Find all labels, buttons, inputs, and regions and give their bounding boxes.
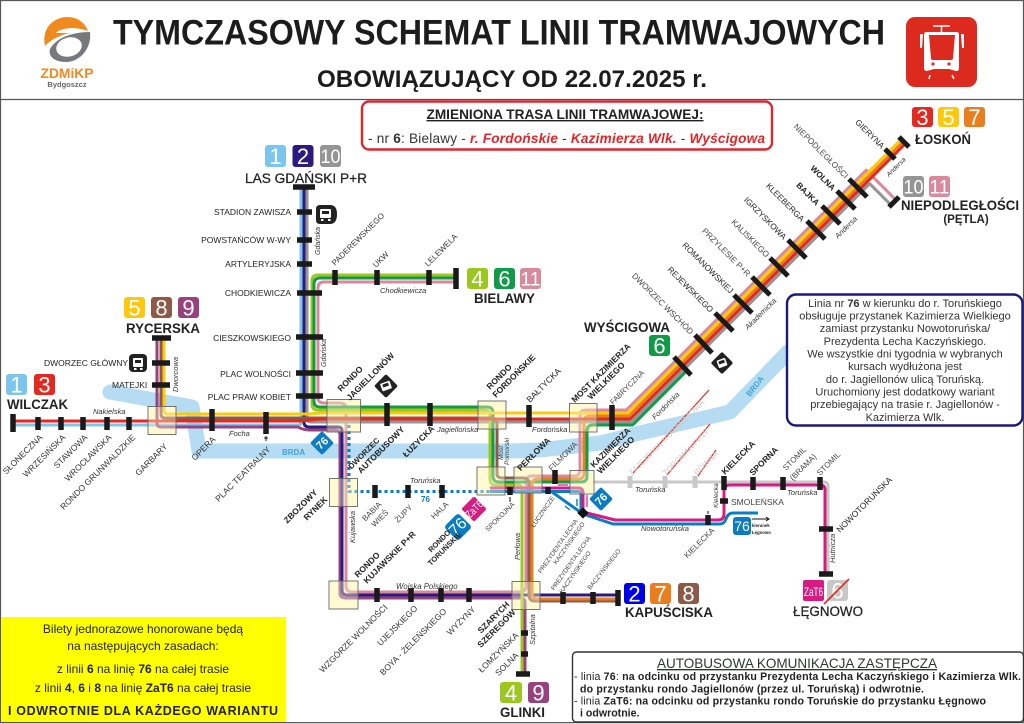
terminus: Łoskoń: 5 <box>942 105 955 130</box>
stop labels: central bold: JAGIELLONÓW <box>344 349 397 402</box>
callout: changed route: - nr 6: Bielawy - r. Fordońskie - Kazimierza Wlk. - Wyścigowa <box>368 131 765 146</box>
info box: line 76: przebiegający na trasie r. Jagiellonów - <box>810 399 1000 411</box>
terminus: Rycerska <box>124 296 200 336</box>
terminus: Niepodległości: NIEPODLEGŁOŚCI <box>901 198 1019 213</box>
line 11 <box>318 170 896 592</box>
stop labels: closed stops: RÓWNA <box>692 449 721 477</box>
terminus: Wilczak: WILCZAK <box>7 397 68 412</box>
line 7 <box>532 142 904 599</box>
terminus: Las Gdański P+R: LAS GDAŃSKI P+R <box>245 171 367 186</box>
stop labels: central bold: WIELKIEGO <box>585 360 627 401</box>
stop labels: Wojska Polskiego: BOYA - ŻELEŃSKIEGO <box>378 606 449 677</box>
terminus: Bielawy: 4 <box>471 266 484 292</box>
stop labels: Prezydenta Lecha Kaczyńskiego and Baczyńskiego <box>537 517 623 595</box>
stop labels: central lower: ŁUZYCKA <box>401 423 436 459</box>
panel: ticket rules: I ODWROTNIE DLA KAŻDEGO WARIANTU <box>8 703 278 718</box>
terminus: Wyścigowa <box>584 320 670 358</box>
line 6 <box>314 278 687 482</box>
badge: ZaT6 at Rondo Toruńskie: ZaT6 <box>463 498 486 521</box>
terminus: Łęgnowo <box>793 578 863 619</box>
stop labels: Chodkiewicza <box>330 211 460 269</box>
stop labels: Dworcowa: DWORZEC GŁÓWNY <box>44 358 128 368</box>
stop labels: central bold <box>335 341 780 585</box>
panel: replacement bus service: do przystanku rondo Jagiellonów (przez ul. Toruńską) i odwrotnie. <box>580 684 924 696</box>
stop labels: diagonal to Łoskoń: ROMANOWSKIEJ <box>680 240 736 295</box>
stop labels: central lower: WIELKIEGO <box>595 434 637 476</box>
terminus: Kapuściska <box>624 582 713 620</box>
stop labels: central lower: RONDO <box>426 528 453 554</box>
badge: 76 at Rondo Toruńskie: 76 <box>446 515 471 540</box>
stop labels: Wojska Polskiego: WZGÓRZE WOLNOŚCI <box>317 602 389 675</box>
terminus: Rycerska: 5 <box>128 296 141 320</box>
stop labels: central bold: RONDO <box>335 364 365 393</box>
tram network lines <box>13 139 906 672</box>
stop labels: Prezydenta Lecha Kaczyńskiego and Baczyńskiego: PREZYDENTA LECHA <box>550 534 593 592</box>
terminus: Łęgnowo: ŁĘGNOWO <box>793 604 863 619</box>
street names: Wojska Polskiego <box>396 582 458 591</box>
stop labels: Gdańska: ARTYLERYJSKA <box>225 259 291 269</box>
street names: Toruńska <box>635 485 666 494</box>
stop labels: Toruńska east: STOMIL <box>781 445 809 472</box>
icon: tram <box>906 17 977 87</box>
terminus: Rycerska: 9 <box>182 296 195 320</box>
terminus: Kapuściska: 7 <box>654 582 667 606</box>
stop labels: grey secondary: WIEŚ <box>370 508 390 529</box>
stop labels: diagonal to Łoskoń <box>630 117 887 336</box>
stop labels: Wilczak line: GARBARY <box>133 441 170 478</box>
icon: bus at Stadion Zawisza <box>316 205 337 224</box>
terminus: Las Gdański P+R <box>245 144 367 186</box>
stop labels: central lower: PERŁOWA <box>515 435 552 473</box>
terminus: Łoskoń: 3 <box>916 105 929 130</box>
stop labels: diagonal to Łoskoń: KALISKIEGO <box>729 217 772 260</box>
line 5 <box>164 139 901 414</box>
stop labels: grey secondary: ŁUCZNICZE <box>530 495 557 529</box>
line 1 <box>13 187 301 425</box>
stop labels: central lower: SZEREGÓW <box>475 606 518 649</box>
badge: 76 direction Łęgnowo: 76 <box>734 518 750 534</box>
stop labels: Gdańska: CIESZKOWSKIEGO <box>213 333 291 343</box>
stop labels: diagonal to Łoskoń: GIERYNA <box>853 117 887 151</box>
street names: Toruńska <box>787 488 818 497</box>
street names: Fordońska <box>532 425 567 434</box>
terminus: Las Gdański P+R: 10 <box>320 147 340 168</box>
terminus: Wyścigowa: 6 <box>653 334 666 358</box>
stop labels: Wojska Polskiego: UJEJSKIEGO <box>375 603 420 648</box>
terminus: Glinki: 9 <box>532 680 545 706</box>
line 4 <box>312 275 522 672</box>
stop labels: diagonal to Łoskoń: PRZYLESIE P+R <box>700 226 753 278</box>
street names: Focha <box>229 429 250 438</box>
terminus: Glinki: GLINKI <box>500 705 545 720</box>
stop labels: Gdańska: PLAC PRAW KOBIET <box>208 392 291 402</box>
stop labels: Gdańska: STADION ZAWISZA <box>214 207 291 217</box>
stop labels: Gdańska: CHODKIEWICZA <box>225 288 291 298</box>
badge: 76 direction Łęgnowo <box>733 517 771 535</box>
info box: line 76: obsługuje przystanek Kazimierza Wielkiego <box>799 310 1011 322</box>
street names: Fordońska <box>650 390 681 421</box>
stop labels: grey secondary: BABIA <box>360 500 384 523</box>
street names <box>93 156 908 645</box>
street names: Pomorski <box>504 437 511 465</box>
stop labels: diagonal to Łoskoń: REJEWSKIEGO <box>666 264 716 315</box>
stop labels: Chodkiewicza: UKW <box>371 250 391 269</box>
stop labels: Wilczak line <box>1 432 273 512</box>
stop labels: Toruńska east: (BRAMA) <box>788 452 819 482</box>
line: grey disused Toruńska <box>593 482 828 574</box>
terminus: Wyścigowa: WYŚCIGOWA <box>584 320 670 335</box>
stop labels: Wojska Polskiego: SOLNA <box>493 650 521 678</box>
stop labels: Prezydenta Lecha Kaczyńskiego and Baczyńskiego: BACZYŃSKIEGO <box>585 547 623 591</box>
direction arrows near Kazimierza Wielkiego <box>558 485 587 510</box>
red strike lines on closed stops <box>633 390 716 476</box>
stop labels: Wojska Polskiego: ŁOMŻYŃSKA <box>476 630 521 674</box>
terminus: Bielawy <box>467 266 541 306</box>
street names: Toruńska <box>410 476 441 485</box>
terminus: Wilczak: 1 <box>10 372 23 398</box>
terminus: Niepodległości: 11 <box>930 178 950 198</box>
info box: line 76: Uruchomiony jest dodatkowy wariant <box>815 386 995 398</box>
street names: Nowotoruńska <box>641 524 689 533</box>
line 76 dotted <box>349 425 490 492</box>
stop labels: Gdańska: POWSTAŃCÓW W-WY <box>201 235 291 245</box>
street names: Gdańska <box>315 227 322 255</box>
stop labels: Wilczak line: STAWOWA <box>52 432 90 470</box>
terminus: Niepodległości: 10 <box>904 178 924 198</box>
info box: line 76: Linia nr 76 w kierunku do r. Toruńskiego <box>808 298 1002 310</box>
line 10 <box>307 184 892 422</box>
street names: Most <box>498 445 505 460</box>
street names: Jagiellońska <box>436 425 478 434</box>
badge: 76 direction Łęgnowo: Łęgnowo <box>752 530 771 535</box>
stop labels: grey secondary: FILMOWA <box>547 440 580 473</box>
stop labels: closed stops: TOROMANTYNY <box>661 427 712 477</box>
stop labels: Wilczak line: SŁONECZNA <box>1 432 45 476</box>
badge: 76 at Kazimierza Wielkiego: 76 <box>593 491 610 508</box>
panel: replacement bus service: i odwrotnie. <box>580 708 639 720</box>
terminus: Rycerska: 8 <box>155 296 168 320</box>
river Brda: BRDA <box>744 374 766 398</box>
stop labels: Gdańska <box>201 207 291 402</box>
stop labels: central lower: TORUŃSKIE <box>426 530 463 568</box>
terminus: Łoskoń: ŁOSKOŃ <box>915 132 971 147</box>
stop labels: Wilczak line: OPERA <box>189 434 218 462</box>
info box: line 76: do r. Jagiellonów ulicą Toruńską. <box>826 374 984 386</box>
stop labels: central lower: SZARYCH <box>476 599 511 635</box>
stop labels: Prezydenta Lecha Kaczyńskiego and Baczyńskiego: KACZYŃSKIEGO <box>551 520 587 566</box>
logo: ZDMiKP Bydgoszcz <box>40 17 94 89</box>
panel: ticket rules: z linii 6 na linię 76 na całej trasie <box>57 662 229 676</box>
stop labels: Wilczak line: RONDO GRUNWALDZKIE <box>58 432 138 512</box>
stop labels: grey secondary: SPOKOJNA <box>485 501 517 533</box>
stop labels: diagonal to Łoskoń: IGRZYSKOWA <box>742 195 789 242</box>
stop labels: central bold: KIELECKA <box>719 439 757 476</box>
line 8 <box>161 338 618 601</box>
street names: Nakielska <box>93 407 126 416</box>
stop labels: Toruńska east: NOWOTORUŃSKA <box>834 474 894 534</box>
stop labels: Toruńska east: SMOLEŃSKA <box>731 497 784 507</box>
stop labels: central lower <box>282 423 637 649</box>
terminus: Rycerska: RYCERSKA <box>126 321 200 336</box>
stop labels: central lower: AUTOBUSOWY <box>355 424 407 475</box>
terminus: Glinki <box>500 680 549 720</box>
interchange backgrounds <box>148 400 597 610</box>
stop labels: Toruńska east: STOMIL <box>815 450 843 477</box>
panel: ticket rules <box>1 617 286 722</box>
terminus: Kapuściska: KAPUŚCISKA <box>625 605 713 620</box>
stop labels: Prezydenta Lecha Kaczyńskiego and Baczyńskiego: KACZYŃSKIEGO <box>557 549 593 595</box>
stop labels: Wojska Polskiego <box>317 602 521 678</box>
stop labels: closed stops: ZAJEZDNIA TRAMWAJOWA <box>627 398 707 477</box>
stop labels: Dworcowa: MATEJKI <box>112 380 147 390</box>
label: 76 on Toruńska: 76 <box>421 495 430 504</box>
icon: bus at Dworzec Wschód <box>711 352 733 374</box>
stop labels: diagonal to Łoskoń: KLEEBERGA <box>764 181 807 224</box>
callout: changed route <box>362 102 772 150</box>
stop labels: central bold: RONDO <box>352 550 382 579</box>
street names: Kujawska <box>348 511 357 543</box>
stop labels: Toruńska east <box>731 445 894 534</box>
street names: Andersa <box>885 156 908 179</box>
stop labels: grey secondary: HALA <box>429 500 451 521</box>
icon: bus at Dworzec Główny <box>129 354 147 372</box>
stop labels: central bold: KUJAWSKIE P+R <box>361 529 418 585</box>
stop labels: grey secondary: KIELECKA <box>682 526 717 560</box>
info box: line 76: zamiast przystanku Nowotoruńska/ <box>820 323 991 335</box>
street names: Chodkiewicza <box>380 286 426 295</box>
panel: replacement bus service: - linia ZaT6: na odcinku od przystanku rondo Toruńskie do przystanku Łęgnowo <box>574 696 987 708</box>
stop labels: Wojska Polskiego: WYŻYNY <box>445 604 478 637</box>
badge: 76 by Brda <box>310 431 334 455</box>
terminus: Las Gdański P+R: 1 <box>269 144 282 169</box>
panel: ticket rules: Bilety jednorazowe honorowane będą <box>43 622 243 636</box>
badge: 76 direction Łęgnowo: kierunek <box>752 523 770 528</box>
subtitle: date: OBOWIĄZUJĄCY OD 22.07.2025 r. <box>317 66 707 93</box>
street names: Szpitalna <box>528 614 537 645</box>
callout: changed route: ZMIENIONA TRASA LINII TRAMWAJOWEJ: <box>426 106 704 122</box>
line 9 <box>157 338 525 672</box>
small stop arrows <box>264 436 708 514</box>
stop labels: Dworcowa <box>44 358 147 390</box>
terminus: Bielawy: 6 <box>498 266 511 292</box>
stop labels: diagonal to Łoskoń: DWORZEC WSCHÓD <box>630 271 696 336</box>
panel: replacement bus service: - linia 76: na odcinku od przystanku Prezydenta Lecha Kaczyńskiego i Kazimierza Wlk. <box>574 671 1021 683</box>
stop labels: central bold: MOST KAZIMIERZA <box>569 341 633 404</box>
stop labels: Wilczak line: WRZESIŃSKA <box>21 432 68 479</box>
panel: ticket rules: na następujących zasadach: <box>67 639 219 653</box>
terminus: Glinki: 4 <box>505 680 517 706</box>
badge: 76 by Brda: 76 <box>314 435 331 452</box>
terminus: Wilczak: 3 <box>38 372 51 398</box>
title: TYMCZASOWY SCHEMAT LINII TRAMWAJOWYCH <box>113 14 885 52</box>
street names: Hutnicza <box>828 534 837 563</box>
panel: replacement bus service: AUTOBUSOWA KOMUNIKACJA ZASTĘPCZA <box>657 656 938 671</box>
street names: Kielecka <box>713 483 720 508</box>
river Brda <box>110 352 788 457</box>
street names: Dworcowa <box>171 357 180 392</box>
terminus: Łoskoń <box>912 105 985 147</box>
terminus: Wilczak <box>6 372 68 412</box>
logo: ZDMiKP Bydgoszcz: ZDMiKP <box>40 65 94 81</box>
terminus: Kapuściska: 8 <box>682 582 695 606</box>
street names: Perłowa <box>513 533 522 560</box>
logo: ZDMiKP Bydgoszcz: Bydgoszcz <box>47 80 87 89</box>
stop labels: central bold: BAŁTYCKA <box>524 366 563 404</box>
line 3 <box>13 144 906 421</box>
stop label: Fabryczna: FABRYCZNA <box>608 368 646 406</box>
stop labels: central lower: ZBOŻOWY <box>282 487 320 525</box>
terminus: Bielawy: 11 <box>520 270 540 290</box>
terminus: Łoskoń: 7 <box>968 105 981 130</box>
info box: line 76: Kazimierza Wlk. <box>866 412 944 424</box>
stop labels: Wilczak line: WROCŁAWSKA <box>62 432 114 483</box>
stop labels: central bold: RONDO <box>484 362 514 391</box>
street names: Gdańska <box>321 339 328 367</box>
terminus: Łęgnowo: 6 <box>831 578 844 604</box>
info box: line 76: kursach wydłużona jest <box>848 361 962 373</box>
stop labels: Prezydenta Lecha Kaczyńskiego and Baczyńskiego: PREZYDENTA LECHA <box>537 517 580 575</box>
stop labels: central lower: RYNEK <box>302 494 330 522</box>
terminus: Niepodległości: (PĘTLA) <box>943 214 989 226</box>
terminus: Łęgnowo: ZaT6 <box>804 585 823 599</box>
stop labels: central lower: KAZIMIERZA <box>588 425 632 469</box>
street names: Akademicka <box>742 296 778 332</box>
icon: bus at Dworzec Autobusowy <box>374 374 398 398</box>
street names: Andersa <box>832 214 859 241</box>
stop labels: central bold: FORDOŃSKIE <box>490 352 538 399</box>
stop labels: diagonal to Łoskoń: WOLNA <box>808 163 838 192</box>
info box: line 76: Prezydenta Lecha Kaczyńskiego. <box>824 336 986 348</box>
terminus: Las Gdański P+R: 2 <box>297 144 309 169</box>
stop labels: central bold: SPORNA <box>747 445 780 477</box>
line 2 <box>304 187 618 595</box>
stop labels: Chodkiewicza: LELEWELA <box>423 232 460 268</box>
terminus: Niepodległości <box>901 176 1019 226</box>
terminus: Bielawy: BIELAWY <box>474 291 535 306</box>
line ZaT6 <box>490 485 825 574</box>
line 76 solid <box>490 492 758 524</box>
info box: line 76 <box>787 294 1022 426</box>
stop labels: diagonal to Łoskoń: NIEPODLEGŁOŚCI <box>792 121 851 180</box>
info box: line 76: We wszystkie dni tygodnia w wybranych <box>807 348 1003 360</box>
stops: grey disused <box>630 476 695 488</box>
stop labels: Wilczak line: PLAC TEATRALNY <box>213 444 273 504</box>
stop labels: central lower: DWORZEC <box>347 436 382 471</box>
stop: Kazimierza Wielkiego diamond <box>577 507 589 519</box>
stop labels: Chodkiewicza: PADEREWSKIEGO <box>330 211 386 267</box>
panel: replacement bus service <box>572 652 1024 722</box>
stop labels: Gdańska: PLAC WOLNOŚCI <box>220 368 291 379</box>
stop labels: grey secondary: ŻUPY <box>393 503 415 525</box>
panel: ticket rules: z linii 4, 6 i 8 na linię ZaT6 na całej trasie <box>35 681 251 695</box>
interchange frames <box>148 400 597 610</box>
stops: black bars <box>13 137 909 674</box>
river Brda: BRDA <box>282 448 305 457</box>
terminus: Kapuściska: 2 <box>628 582 641 606</box>
stop labels: diagonal to Łoskoń: BAJKA <box>794 180 822 207</box>
badge: 76 at Kazimierza Wielkiego <box>589 487 613 511</box>
stop labels: grey secondary <box>360 440 717 560</box>
